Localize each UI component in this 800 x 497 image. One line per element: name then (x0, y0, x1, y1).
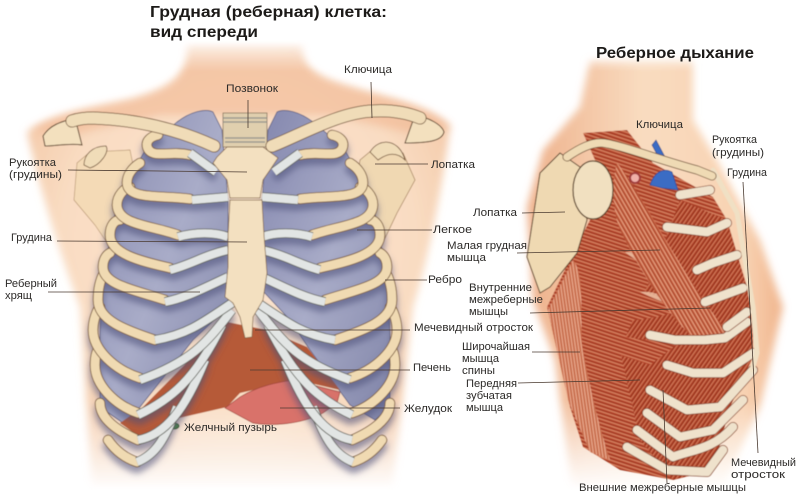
label: serratus anterior: мышца (466, 402, 504, 414)
label: manubrium side: (грудины) (712, 147, 764, 159)
label: liver: Печень (413, 362, 451, 374)
label: internal intercostal muscles: Внутренние (469, 282, 532, 294)
label: costal cartilage: хрящ (5, 290, 32, 302)
muscle mass (547, 130, 753, 480)
ribs: viewer right (258, 135, 397, 462)
sternum: manubrium (213, 147, 278, 198)
vein: blue (650, 140, 678, 190)
lung: viewer left (100, 110, 228, 423)
latissimus dorsi muscle (548, 260, 610, 460)
title: left figure: вид спереди (150, 24, 258, 41)
label: sternum side: Грудина (727, 167, 768, 179)
ribs: viewer left (93, 135, 232, 462)
ribs: side view (627, 190, 753, 472)
stomach (225, 380, 340, 424)
label: xiphoid process: Мечевидный отросток (414, 322, 533, 334)
label: scapula: Лопатка (431, 159, 476, 171)
label: manubrium (9, 157, 247, 181)
label: vertebra (226, 83, 278, 128)
label: clavicle side: Ключица (636, 119, 684, 131)
label: latissimus dorsi: Широчайшая (462, 341, 530, 353)
scapula: side view (527, 153, 587, 293)
label: rib (385, 274, 462, 286)
left figure: rib cage front view (27, 42, 452, 490)
liver (120, 322, 340, 437)
gallbladder (169, 423, 179, 429)
label: latissimus dorsi: мышца (462, 353, 500, 365)
vertebra (223, 113, 267, 147)
label: internal intercostal muscles (469, 282, 710, 318)
skin: neck and shoulders (30, 42, 452, 135)
title: left figure (150, 4, 387, 41)
label: pectoralis minor: Малая грудная (447, 240, 527, 252)
label: internal intercostal muscles: межреберные (469, 294, 543, 306)
label: lung (357, 224, 472, 236)
label: vertebra: Позвонок (226, 83, 278, 95)
label: lung: Легкое (433, 224, 472, 236)
label: sternum: Грудина (11, 232, 53, 244)
skin: torso front (27, 42, 450, 490)
skin: side torso (527, 60, 783, 490)
clavicle: side view (567, 143, 712, 176)
rib cage ribs (93, 135, 397, 462)
label: xiphoid process side: отросток (731, 469, 785, 481)
clavicle: viewer right (272, 111, 444, 160)
label: stomach: Желудок (404, 403, 452, 415)
label: clavicle (344, 64, 393, 118)
scapula: viewer left (74, 150, 140, 250)
title: left figure: Грудная (реберная) клетка: (150, 4, 387, 21)
label: xiphoid process side (731, 457, 796, 481)
label: manubrium: (грудины) (9, 169, 62, 181)
label: latissimus dorsi: спины (462, 365, 495, 377)
label: external intercostal muscles: Внешние межреберные мышцы (579, 482, 746, 494)
artery ring (630, 173, 640, 183)
label: gallbladder: Желчный пузырь (184, 422, 277, 434)
label: rib: Ребро (428, 274, 462, 286)
clavicle: viewer left (43, 118, 214, 168)
label: serratus anterior: зубчатая (466, 390, 512, 402)
label: pectoralis minor: мышца (447, 252, 487, 264)
sternum: body and xiphoid process (225, 200, 267, 338)
label: serratus anterior: Передняя (466, 378, 517, 390)
label: clavicle: Ключица (344, 64, 393, 76)
scapula: viewer right (352, 150, 415, 255)
glenoid cavity (573, 161, 613, 219)
label: scapula side: Лопатка (473, 207, 518, 219)
label: external intercostal muscles (579, 390, 746, 494)
label: sternum side (727, 167, 768, 453)
label: scapula (375, 159, 476, 171)
label: internal intercostal muscles: мышцы (469, 306, 508, 318)
label: xiphoid process side: Мечевидный (731, 457, 796, 469)
label: costal cartilage (5, 278, 200, 302)
intercostal muscles (620, 200, 753, 480)
label: costal cartilage: Реберный (5, 278, 57, 290)
title: right figure: Реберное дыхание (596, 45, 754, 62)
lung: viewer right (262, 110, 390, 420)
pectoralis minor muscle (614, 163, 728, 340)
label: pectoralis minor (447, 240, 660, 264)
label: serratus anterior (466, 378, 640, 414)
sternum: side view (713, 170, 757, 370)
label: manubrium side: Рукоятка (712, 134, 758, 146)
label: latissimus dorsi (462, 341, 580, 377)
label: manubrium: Рукоятка (9, 157, 57, 169)
label: scapula side (473, 207, 565, 219)
serratus anterior bands (585, 250, 680, 365)
right figure: rib breathing side view (527, 60, 783, 490)
label: manubrium side (712, 134, 764, 159)
